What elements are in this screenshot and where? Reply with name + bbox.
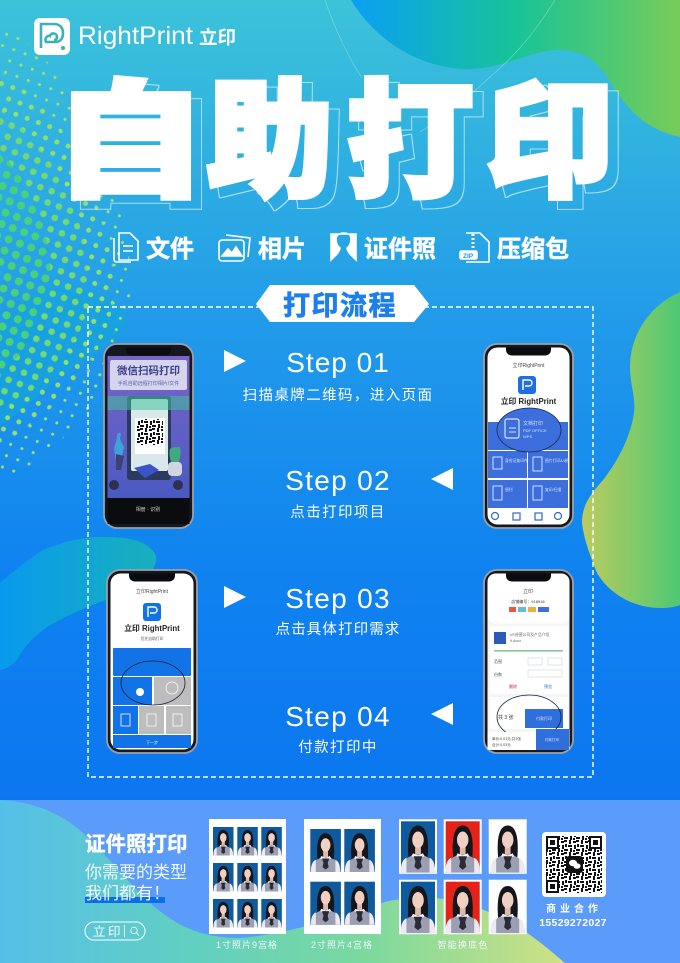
title outline copy [64,80,623,221]
highlight ellipse [121,661,185,705]
qr code [542,832,606,897]
label: files: 文件 [146,235,194,263]
screen: print options: 图片打印A4纸 [545,458,569,463]
file types row [114,233,569,263]
section heading [256,285,429,322]
blob: top right [351,0,680,137]
screen: print options: PDF OFFICE [523,428,547,433]
band wave [0,800,565,963]
screen: print options: 身份证复印件 [505,458,528,463]
sheet [209,819,286,934]
highlight ellipse: document print [497,408,561,452]
step 2 caption: 点击打印项目 [290,504,386,521]
icon: id photo [331,233,356,260]
promo heading: 证件照打印 [85,833,188,856]
notch [506,348,551,356]
notch [506,574,551,582]
contact label: 商业合作 [546,902,602,915]
step 4 caption: 付款打印中 [298,739,378,756]
screen: scan poster: 手机自助远程打印相片/文件 [118,380,179,387]
screen: payment: 店铺编号：918918 [511,598,545,604]
notch [126,348,171,356]
title outline copy: 自 [64,81,216,221]
promo text [85,833,188,940]
icon: photos [219,235,250,261]
band base [0,800,680,963]
arrow left [431,703,453,725]
notch [129,574,175,582]
screen: payment: 共 3 张 [498,714,514,721]
icon: zip: ZIP [463,253,474,260]
phone body [484,570,573,753]
blob: upper left [0,285,125,425]
underline [85,897,165,903]
screen: payment: 立印 [523,588,533,595]
title solid: 助 [207,72,333,213]
screen: print options: 立印 RightPrint [501,396,557,406]
screen: print options: WPS [523,434,532,439]
title [54,72,623,221]
promo line 2: 我们都有！ [85,884,170,903]
brand name: RightPrint [78,22,193,50]
screen: payment: 单价:0.01元,共3张 [492,736,521,741]
photos [310,829,375,925]
label: zip: 压缩包 [497,236,569,263]
label: id photo: 证件照 [364,236,436,263]
screen: print options: 便利 [505,487,513,492]
arrow left [431,468,453,490]
arrow right [224,350,246,372]
screen: payment: 删除 [509,683,517,689]
screen: scan poster: 相册 · 识别 [136,506,160,513]
step 4 heading: Step 04 [285,701,391,732]
halftone dots [0,20,131,485]
icon: zip [460,233,489,262]
title solid: 印 [487,72,613,213]
screen: scan poster [108,356,190,524]
photos [213,827,282,928]
screen: payment: 9.docx [510,639,521,643]
screen: payment: VE经营公司及产品介绍 [510,632,549,637]
blob: right side [582,292,680,608]
screen: choose print type: 下一步 [146,739,158,745]
screen: payment: 付款打印 [545,737,560,742]
phone 2 [484,344,573,528]
screen: choose print type: 立印RightPrint [136,588,169,595]
caption: background colours: 智能换底色 [437,939,489,950]
icon: document [114,233,138,262]
screen: payment: 范围 [494,658,502,664]
label: photos: 相片 [258,236,306,263]
phone 4 [484,570,573,753]
step 3 heading: Step 03 [285,583,391,614]
title outline copy: 印 [497,80,623,221]
screen: payment: 份数 [494,671,502,677]
screen: choose print type [110,574,194,750]
screen: payment: 预览 [544,683,552,689]
step 2 heading: Step 02 [285,465,391,496]
title solid: 自 [54,73,206,213]
photo set: background colours [400,820,526,933]
photo sheet: 4 grid [304,819,381,934]
icon: logo mark [34,18,70,55]
phone body [107,570,197,753]
step 4 [285,701,453,756]
screen: choose print type: 优先自助打印 [141,636,164,641]
screen: scan poster: 微信扫码打印 [117,364,180,377]
section heading: 打印流程 [283,291,397,321]
promo line 1: 你需要的类型 [85,863,187,882]
screen: print options: 复印/扫描 [545,487,561,492]
title solid [54,72,613,213]
step 3 [224,583,400,638]
phone 1 [104,344,193,528]
caption: 4 grid: 2寸照片4宫格 [311,939,373,950]
step 2 [285,465,453,521]
photo sheet: 9 grid [209,819,286,934]
screen: payment [488,574,570,750]
dashed frame [88,307,593,777]
logo [34,18,236,55]
step 3 caption: 点击具体打印需求 [276,621,400,638]
arrow right [224,586,246,608]
screen: choose print type: 立印 RightPrint [124,623,180,633]
sheet [304,819,381,934]
contact phone number: 15529272027 [539,917,607,929]
brand name chinese: 立印 [199,27,236,48]
phone body [104,344,193,528]
decorative hairline curves [325,0,555,132]
caption: 9 grid: 1寸照片9宫格 [216,939,278,950]
screen: print options: 文档打印 [523,420,543,427]
title outline copy: 助 [217,80,343,221]
screen: print options: 立印RightPrint [513,362,545,369]
highlight ellipse [497,695,561,739]
screen: print options [488,348,570,524]
title outline copy: 打 [357,80,483,221]
step 1 [224,347,433,404]
step 1 caption: 扫描桌牌二维码，进入页面 [243,387,433,404]
screen: payment: 付款打印 [536,715,552,721]
bottom band [0,800,680,963]
phone 3 [107,570,197,753]
blob: lower left [0,537,156,670]
screen: payment: 合计:0.03元 [492,742,511,747]
step 1 heading: Step 01 [286,347,390,378]
process panel [88,285,593,777]
pill search: 立印 [93,924,123,939]
title solid: 打 [347,72,473,213]
phone body [484,344,573,528]
